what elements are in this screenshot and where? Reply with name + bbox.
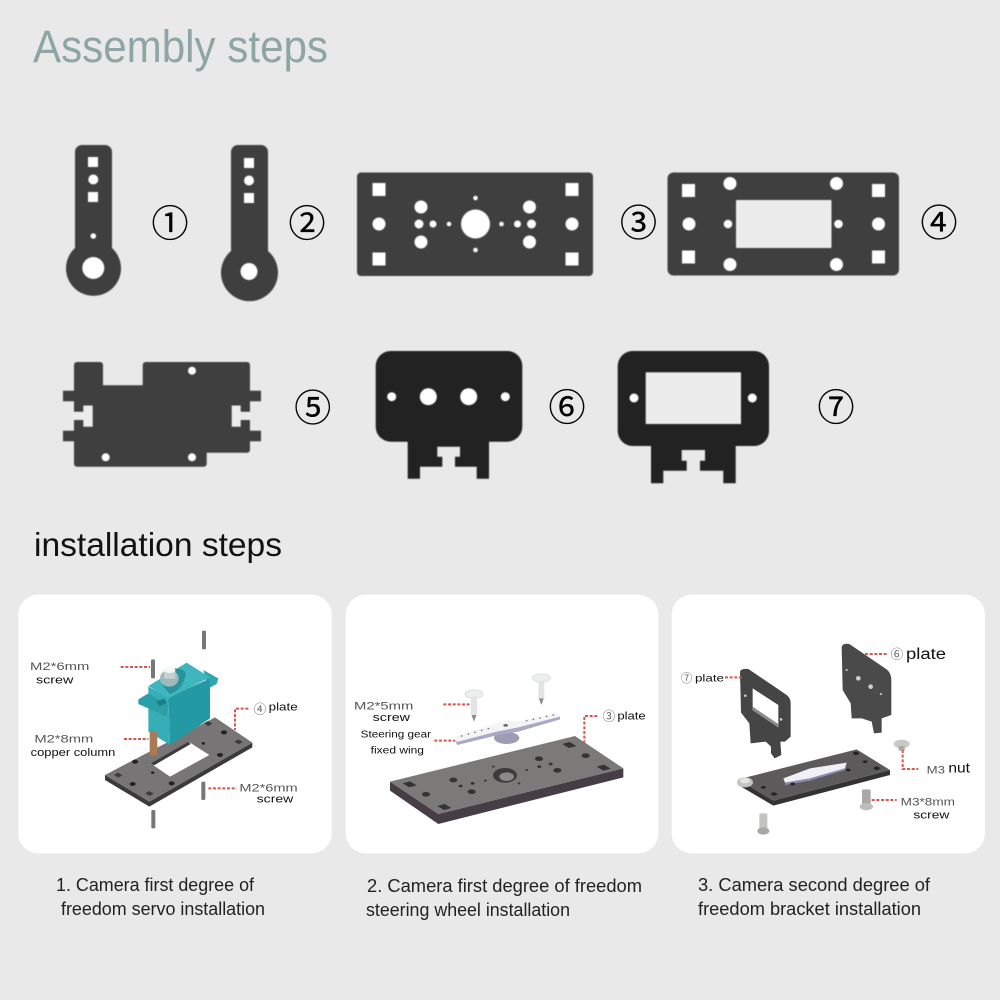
labels: fixed wing	[371, 745, 424, 756]
labels: ⑥	[891, 644, 904, 663]
number 1: ①	[152, 194, 188, 248]
heading: installation steps: installation steps	[34, 526, 282, 563]
part 2	[221, 145, 278, 301]
labels: screw	[913, 809, 949, 821]
labels: plate	[695, 674, 725, 685]
steering gear fixed wing	[455, 713, 560, 745]
number 5: ⑤	[294, 378, 331, 432]
plate 4 exploded diagram	[105, 717, 252, 807]
caption 1: 1. Camera first degree of	[56, 875, 255, 895]
labels: plate	[269, 702, 298, 714]
number 6: ⑥	[548, 378, 586, 432]
caption 2: steering wheel installation	[366, 900, 570, 920]
part 4	[668, 172, 899, 276]
labels: screw	[373, 712, 410, 724]
leader lines	[121, 667, 248, 788]
number 3: ③	[620, 193, 657, 247]
caption 3: 3. Camera second degree of	[698, 875, 931, 895]
labels	[681, 644, 970, 821]
base plate with wing	[737, 749, 890, 806]
title: Assembly steps: Assembly steps	[33, 21, 328, 72]
labels: M2*6mm	[239, 783, 298, 795]
labels: M3*8mm	[901, 797, 955, 809]
part 1	[66, 145, 121, 296]
labels: ③	[603, 705, 616, 724]
plate 6	[842, 644, 891, 733]
number 2: ②	[288, 194, 326, 248]
caption 2	[366, 876, 642, 920]
caption 2: 2. Camera first degree of freedom	[367, 876, 642, 896]
labels: M2*6mm	[30, 661, 89, 673]
part 6	[376, 351, 522, 479]
part 7	[618, 351, 769, 483]
labels: screw	[257, 793, 293, 805]
screws and nut	[757, 740, 910, 835]
leader lines	[725, 654, 918, 800]
caption 1: freedom servo installation	[61, 899, 265, 919]
part 5	[63, 362, 261, 467]
labels: copper column	[31, 747, 115, 759]
plate 7	[740, 669, 791, 758]
labels: ④	[254, 699, 267, 718]
wing screws	[465, 674, 550, 722]
caption 3	[698, 875, 931, 919]
part 3	[357, 172, 593, 276]
screws and copper column	[150, 631, 206, 828]
labels: M2*5mm	[354, 700, 413, 712]
panel: servo installation card	[18, 595, 332, 853]
labels: Steering gear	[361, 730, 432, 741]
caption 3: freedom bracket installation	[698, 899, 921, 919]
number 7: ⑦	[818, 378, 854, 432]
labels	[354, 700, 646, 756]
labels: plate	[617, 710, 646, 722]
labels: nut	[948, 760, 970, 776]
panel: steering wheel installation card	[346, 595, 658, 853]
labels: M3	[927, 764, 945, 776]
labels: screw	[36, 674, 73, 686]
labels	[30, 661, 298, 805]
caption 1	[56, 875, 265, 919]
plate 3 exploded diagram	[390, 736, 623, 824]
labels: ⑦	[681, 670, 692, 686]
labels: plate	[906, 646, 946, 663]
servo motor	[138, 663, 218, 745]
labels: M2*8mm	[34, 733, 93, 745]
panel: bracket installation card	[672, 595, 985, 853]
leader lines	[434, 704, 597, 743]
number 4: ④	[920, 193, 958, 247]
